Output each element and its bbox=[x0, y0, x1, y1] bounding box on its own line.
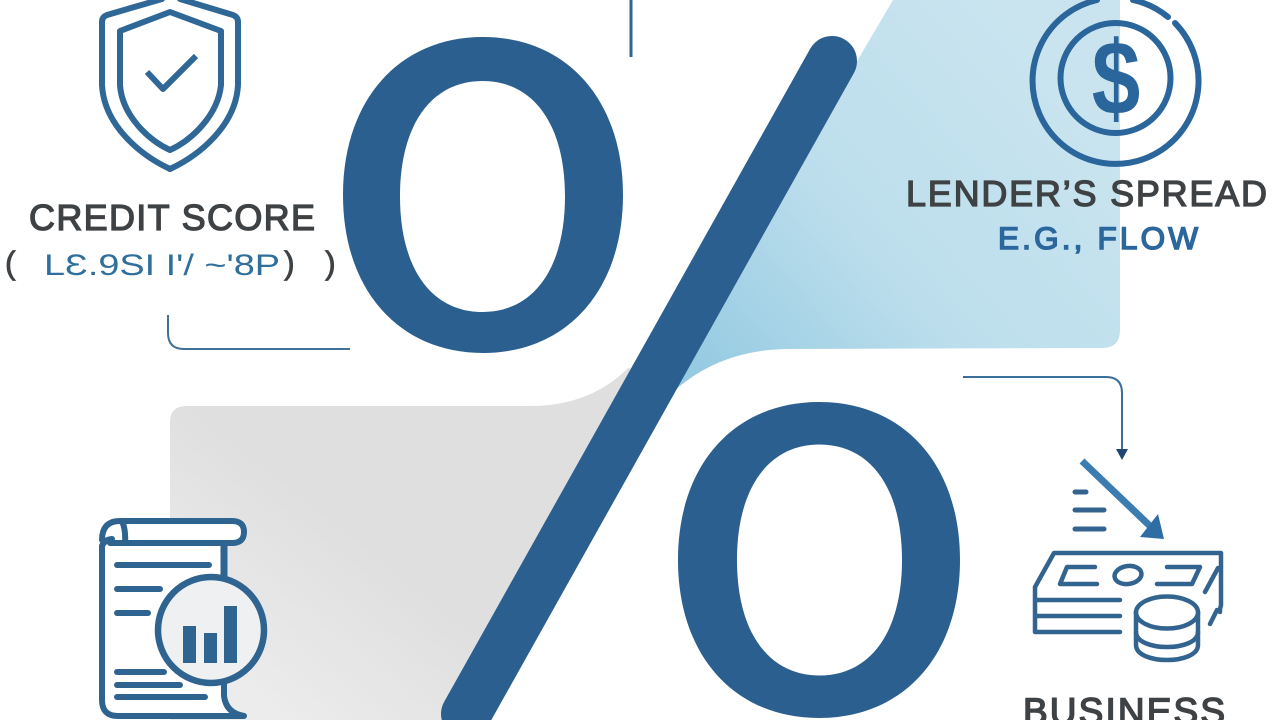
percent bottom zero bbox=[678, 402, 960, 718]
label: credit score subtext bbox=[5, 245, 336, 282]
panel: light blue background bbox=[640, 0, 1120, 392]
arrow: lender to business bbox=[963, 377, 1128, 460]
icon: dollar coin: $ bbox=[1092, 21, 1140, 137]
icon: dollar coin bbox=[1033, 0, 1199, 164]
heading: lender's spread: LENDER’S SPREAD bbox=[906, 173, 1267, 214]
connector: credit score bbox=[168, 315, 350, 349]
icon: shield with check bbox=[102, 0, 238, 169]
percent slash bbox=[466, 61, 832, 714]
icon: cash stack with coins and down arrow bbox=[1035, 461, 1221, 660]
percent sign bbox=[343, 37, 960, 718]
label: credit score subtext: ) bbox=[325, 245, 336, 281]
magnifier bbox=[158, 577, 264, 683]
percent top zero bbox=[343, 37, 623, 353]
report text lines bbox=[117, 565, 209, 697]
label: credit score subtext: ( bbox=[5, 245, 16, 281]
top vertical connector bbox=[630, 0, 632, 57]
label: credit score subtext: ) bbox=[284, 245, 295, 281]
arrow down bbox=[1082, 461, 1164, 539]
label: credit score subtext: LƐ.9SI I'/ ~'8P bbox=[44, 249, 280, 282]
heading: credit score: CREDIT SCORE bbox=[29, 197, 315, 238]
icon: report with magnifier chart bbox=[101, 521, 264, 717]
panel: grey background bbox=[170, 368, 640, 720]
label: e.g., flow: E.G., FLOW bbox=[998, 220, 1198, 256]
